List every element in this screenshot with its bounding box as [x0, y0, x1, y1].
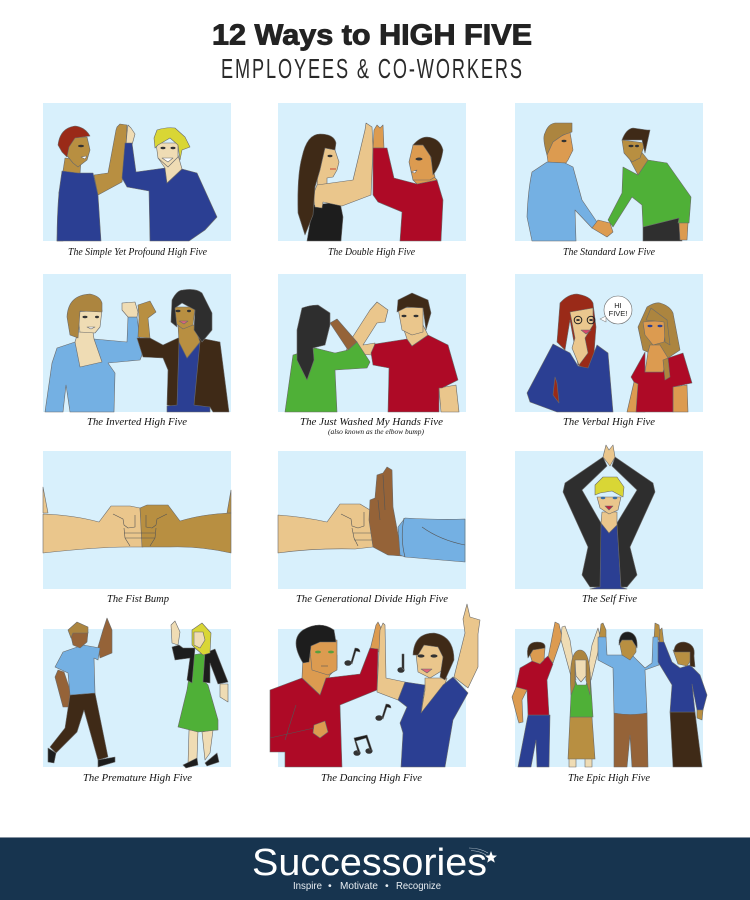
panel: The Just Washed My Hands Five	[278, 274, 466, 436]
icon: music notes	[344, 648, 405, 756]
caption: The Generational Divide High Five	[296, 594, 448, 605]
panel: The Standard Low Five	[515, 103, 703, 258]
figure: left man	[527, 123, 613, 241]
figure: walking man	[48, 618, 115, 767]
figure: left arm and fist	[43, 487, 143, 553]
caption: The Standard Low Five	[563, 247, 655, 258]
panel: The Self Five	[515, 445, 703, 605]
panel: The Dancing High Five	[270, 604, 480, 784]
caption: The Double High Five	[328, 247, 415, 258]
panel: The Epic High Five	[512, 622, 707, 784]
caption: The Inverted High Five	[87, 417, 187, 428]
caption: The Fist Bump	[107, 594, 169, 605]
panel: The Generational Divide High Five	[278, 451, 466, 605]
figure: woman in green dress	[171, 621, 228, 768]
panel: The Premature High Five	[43, 618, 231, 784]
subtitle: EMPLOYEES & CO-WORKERS	[221, 53, 522, 84]
figure: flat hand	[369, 467, 402, 556]
figure: blue sleeve	[398, 518, 465, 562]
panel: The Inverted High Five	[43, 274, 231, 428]
figure: man	[373, 125, 443, 241]
figure: right woman	[137, 289, 229, 412]
caption: The Dancing High Five	[321, 773, 422, 784]
tagline: Recognize	[396, 880, 441, 892]
figure: fist	[278, 504, 373, 553]
caption: The Premature High Five	[83, 773, 192, 784]
tagline: Motivate	[340, 880, 378, 892]
logo wordmark: Successories	[252, 842, 487, 884]
figure: left woman	[527, 294, 613, 412]
figure: right man	[608, 128, 691, 241]
figure: right man	[345, 293, 459, 412]
figure: right arm and fist	[140, 490, 231, 553]
panel: The Fist Bump	[43, 451, 231, 605]
figure: left woman	[285, 305, 370, 412]
figure: man in blue	[598, 623, 661, 767]
title: 12 Ways to HIGH FIVE	[212, 20, 532, 52]
caption: The Just Washed My Hands Five	[300, 417, 443, 428]
tagline	[293, 880, 441, 892]
figure: woman in navy	[658, 628, 707, 767]
speech bubble	[600, 296, 632, 324]
figure: woman	[298, 123, 373, 241]
caption: The Self Five	[582, 594, 637, 605]
caption: The Simple Yet Profound High Five	[68, 247, 207, 258]
speech bubble: HI	[614, 301, 622, 310]
caption: The Epic High Five	[568, 773, 650, 784]
figure: left woman	[45, 294, 142, 412]
panel: The Double High Five	[278, 103, 466, 258]
sub caption: (also known as the elbow bump)	[328, 427, 424, 436]
tagline: •	[385, 880, 389, 892]
caption: The Verbal High Five	[563, 417, 655, 428]
figure: left man	[57, 124, 127, 241]
figure: right man	[122, 125, 217, 241]
speech bubble: FIVE!	[609, 309, 627, 318]
tagline: •	[328, 880, 332, 892]
figure: person with raised arms	[563, 445, 655, 589]
figure: woman in blue	[377, 604, 480, 767]
icon: star with swoosh	[469, 848, 497, 863]
figure: woman in green	[561, 626, 601, 767]
footer band	[0, 837, 750, 900]
figure: right woman	[627, 303, 692, 412]
tagline: Inspire	[293, 880, 322, 892]
figure: man in red	[512, 622, 562, 767]
figure: man in red	[270, 622, 381, 767]
panel: The Simple Yet Profound High Five	[43, 103, 231, 258]
panel: The Verbal High Five	[515, 274, 703, 428]
